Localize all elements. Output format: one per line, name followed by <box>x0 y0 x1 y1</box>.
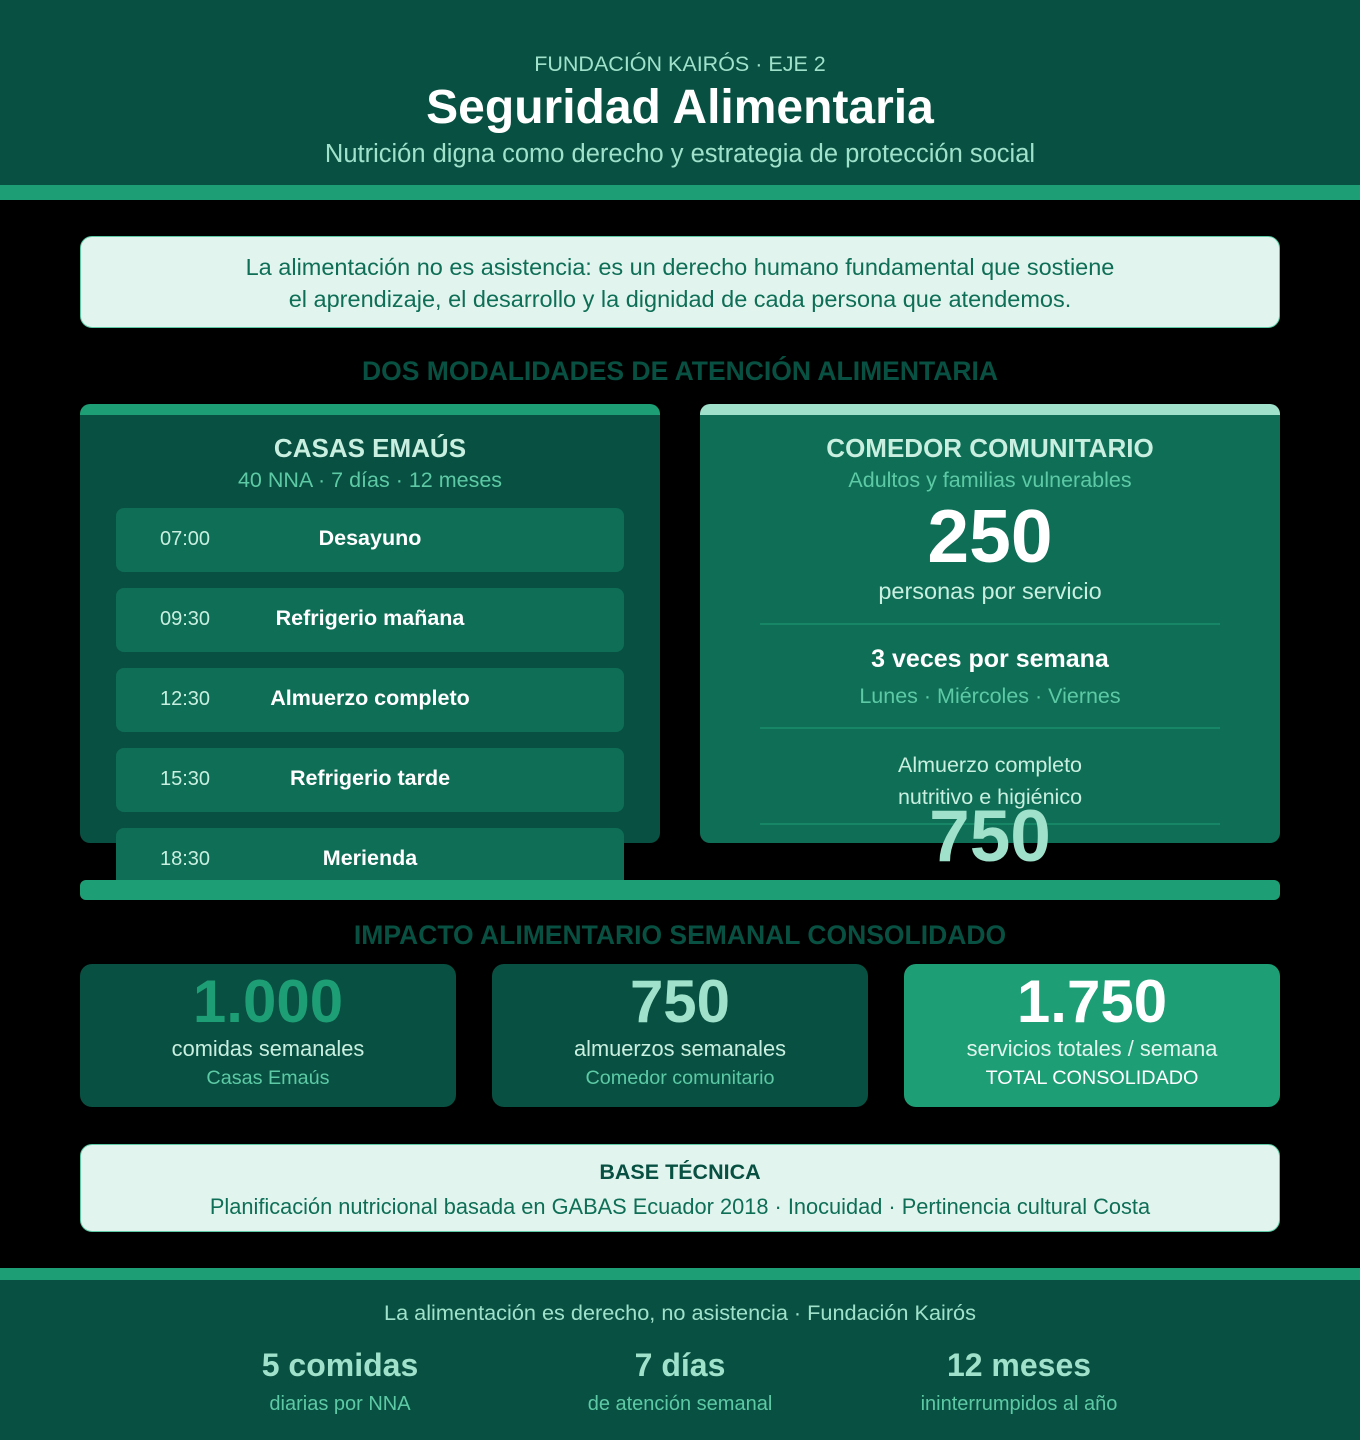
meal row <box>116 508 624 572</box>
stat card 2: 750 <box>630 968 730 1035</box>
panel: comedor <box>700 404 1280 877</box>
footer tagline: La alimentación es derecho, no asistencia · Fundación Kairós <box>384 1300 976 1325</box>
footer stat: diarias por NNA <box>269 1393 411 1415</box>
footer stat: ininterrumpidos al año <box>921 1393 1117 1415</box>
section title: modalidades: DOS MODALIDADES DE ATENCIÓN ALIMENTARIA <box>362 356 998 386</box>
days: Lunes · Miércoles · Viernes <box>859 684 1121 708</box>
meal row <box>116 828 624 880</box>
title: Seguridad Alimentaria <box>426 81 934 134</box>
meal row <box>116 668 624 732</box>
divider bar <box>80 880 1280 900</box>
stat card 3: TOTAL CONSOLIDADO <box>986 1067 1198 1089</box>
meal row: 18:30 <box>160 848 210 870</box>
description <box>898 753 1082 809</box>
stat card 3: 1.750 <box>1017 968 1167 1035</box>
subheading: Adultos y familias vulnerables <box>848 468 1132 492</box>
stat card 3 <box>904 964 1280 1107</box>
meal row: Desayuno <box>319 526 421 550</box>
meal row: 12:30 <box>160 688 210 710</box>
base tecnica box <box>80 1144 1280 1232</box>
frequency: 3 veces por semana <box>871 645 1109 673</box>
quote box <box>80 236 1280 328</box>
stat card 1 <box>80 964 456 1107</box>
stat card 2 <box>492 964 868 1107</box>
footer stat: de atención semanal <box>588 1393 772 1415</box>
panel: casas emaus <box>80 404 660 880</box>
description: Almuerzo completo <box>898 753 1082 777</box>
text: Planificación nutricional basada en GABAS Ecuador 2018 · Inocuidad · Pertinencia cultural Costa <box>210 1194 1150 1219</box>
stat card 2: Comedor comunitario <box>585 1067 775 1089</box>
description: nutritivo e higiénico <box>898 785 1082 809</box>
meal row <box>116 588 624 652</box>
quote box: La alimentación no es asistencia: es un derecho humano fundamental que sostiene <box>246 254 1114 280</box>
heading: COMEDOR COMUNITARIO <box>826 433 1154 463</box>
panel heading: CASAS EMAÚS <box>274 433 466 463</box>
footer stat: 5 comidas <box>262 1347 418 1383</box>
footer stat: 12 meses <box>947 1347 1091 1383</box>
meal row <box>116 748 624 812</box>
meal row: Refrigerio tarde <box>290 766 450 790</box>
header <box>0 0 1360 185</box>
meal row: Refrigerio mañana <box>276 606 464 630</box>
overflow number 750: 750 <box>929 796 1051 877</box>
section title: impacto: IMPACTO ALIMENTARIO SEMANAL CONSOLIDADO <box>354 920 1006 950</box>
footer stat: 7 días <box>635 1347 725 1383</box>
footer stat <box>921 1347 1117 1415</box>
footer stat <box>262 1347 418 1415</box>
panel subheading: 40 NNA · 7 días · 12 meses <box>238 468 502 492</box>
meal row: Almuerzo completo <box>270 686 470 710</box>
footer <box>0 1280 1360 1440</box>
stat card 3: servicios totales / semana <box>967 1036 1217 1061</box>
quote box: el aprendizaje, el desarrollo y la dignidad de cada persona que atendemos. <box>289 286 1071 312</box>
heading: BASE TÉCNICA <box>599 1160 761 1184</box>
meal row: 09:30 <box>160 608 210 630</box>
meal row: 15:30 <box>160 768 210 790</box>
stat card 2: almuerzos semanales <box>574 1036 786 1061</box>
meal row: 07:00 <box>160 528 210 550</box>
kicker: FUNDACIÓN KAIRÓS · EJE 2 <box>534 52 826 76</box>
big number 250: 250 <box>927 494 1053 578</box>
stat card 1: comidas semanales <box>172 1036 364 1061</box>
stat card 1: 1.000 <box>193 968 343 1035</box>
footer stat <box>588 1347 772 1415</box>
subtitle: Nutrición digna como derecho y estrategia de protección social <box>325 140 1035 168</box>
label: personas por servicio <box>878 578 1102 604</box>
meal row: Merienda <box>323 846 417 870</box>
stat card 1: Casas Emaús <box>206 1067 330 1089</box>
